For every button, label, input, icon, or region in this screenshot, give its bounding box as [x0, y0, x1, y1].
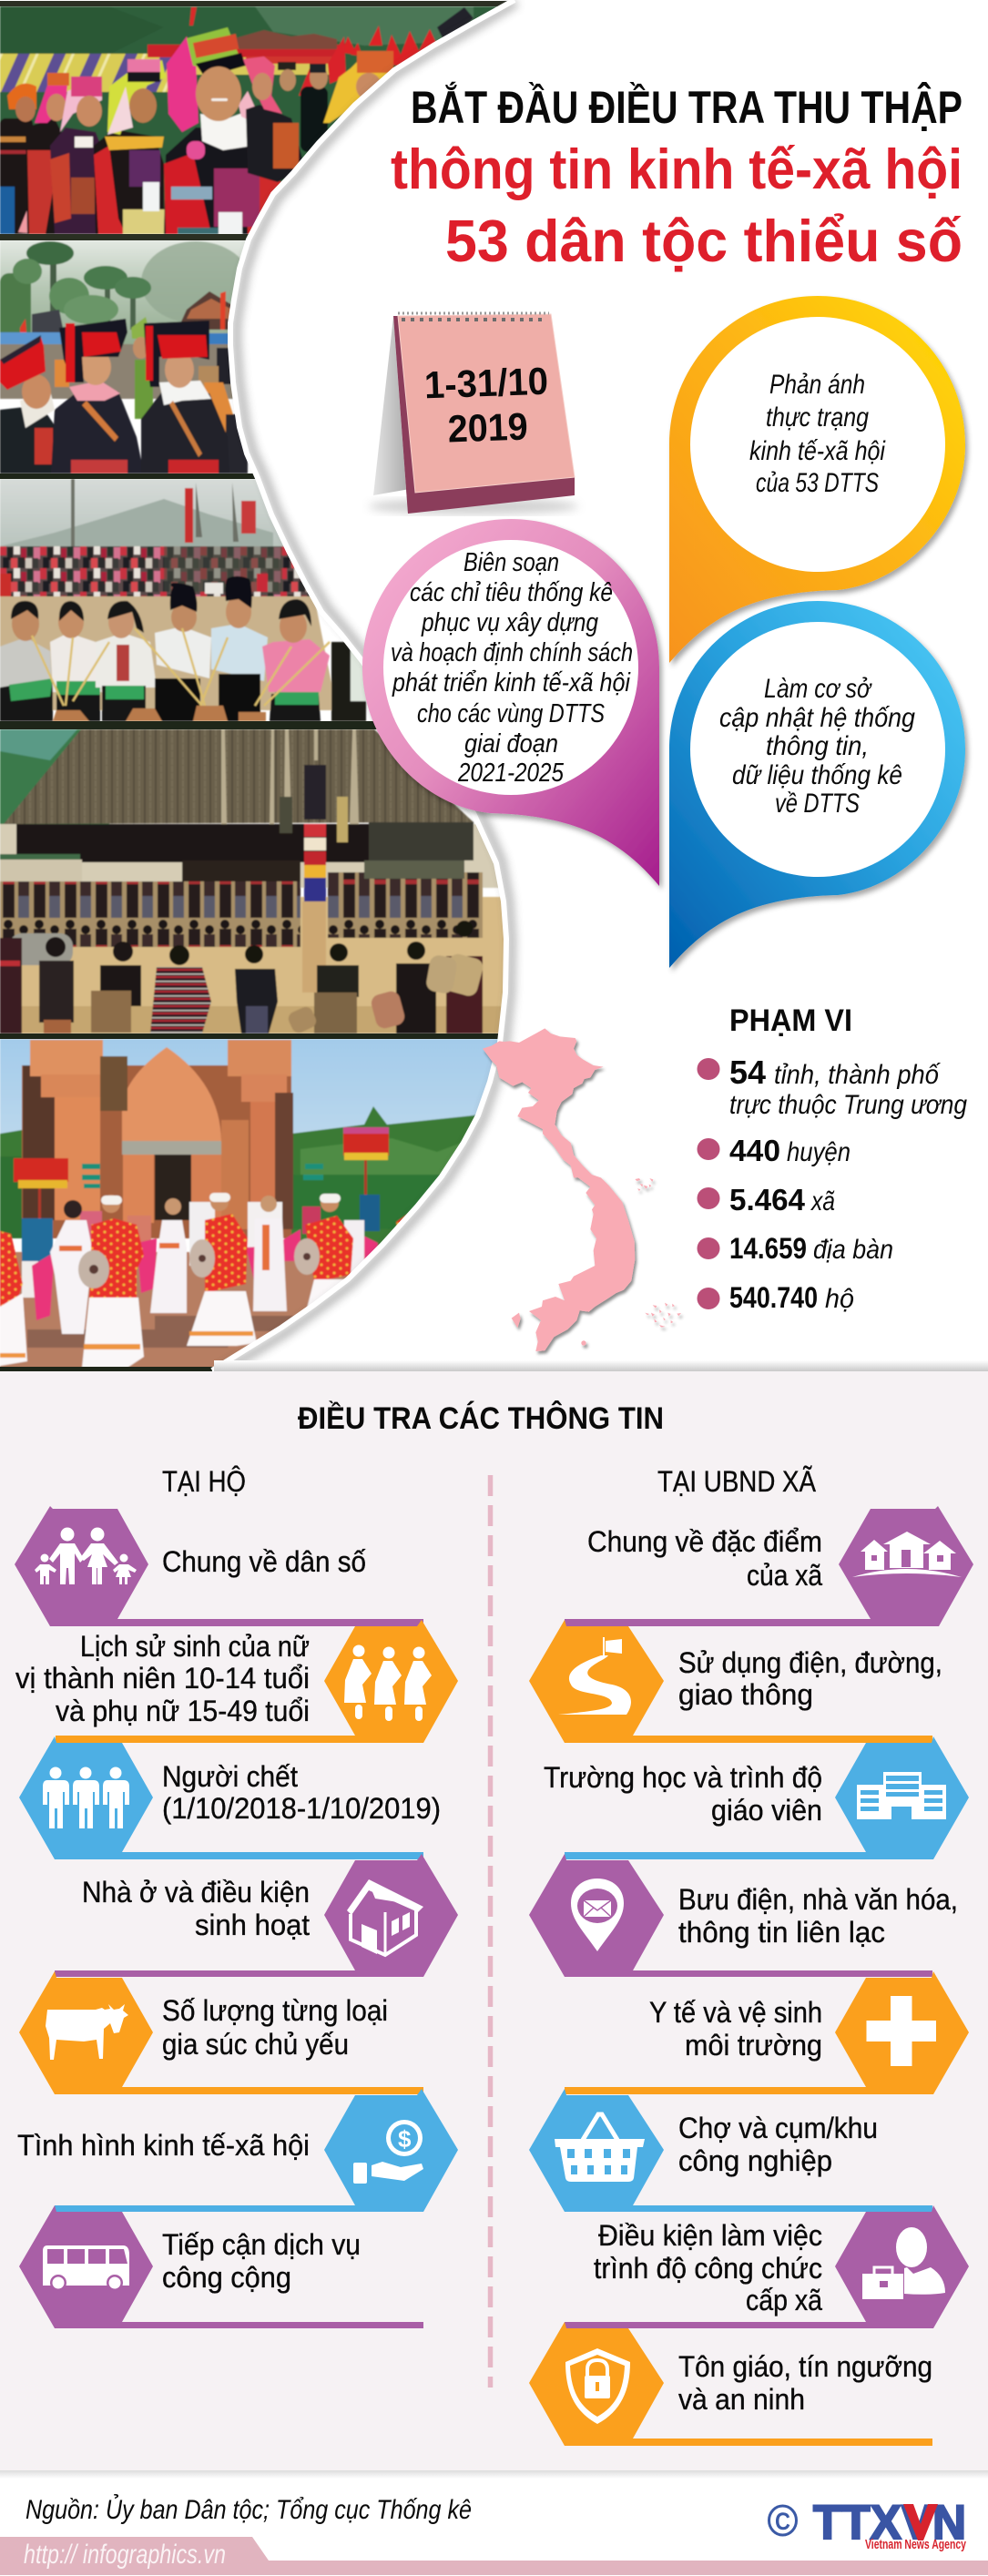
- row: religion and security: và an ninh: [678, 2383, 805, 2416]
- row: working conditions: cấp xã: [746, 2284, 822, 2316]
- scope: communes: xã: [810, 1186, 835, 1217]
- row: public services: [19, 2205, 423, 2328]
- curved white background shape: [212, 0, 988, 1375]
- dark band: between photo 2 and 3: [0, 473, 273, 479]
- calendar spiral: [398, 311, 549, 315]
- row: commune characteristics: Chung về đặc điểm: [587, 1525, 822, 1558]
- third girl: [50, 127, 105, 234]
- callout: yellow pin: thực trạng: [766, 402, 869, 433]
- fourth girl: [94, 129, 164, 234]
- callout: blue pin: dữ liệu thống kê: [732, 760, 902, 790]
- callout: pink pin: [362, 519, 659, 886]
- row: birth history: và phụ nữ 15-49 tuổi: [56, 1695, 310, 1727]
- far left girl: [0, 118, 33, 234]
- heading: commune column: TẠI UBND XÃ: [657, 1465, 817, 1498]
- calendar date: 2019: [447, 404, 528, 451]
- calendar date: 1-31/10: [423, 360, 549, 406]
- row: post office and culture: thông tin liên lạc: [678, 1916, 885, 1949]
- photo: women with red fringed hats: [0, 240, 273, 473]
- row: working conditions: [565, 2205, 969, 2328]
- woman 3: [141, 392, 229, 473]
- row: schools: Trường học và trình độ: [544, 1761, 822, 1794]
- row: post office and culture: [529, 1854, 958, 1977]
- icon: three people: [43, 1767, 129, 1828]
- scope: districts: [698, 1134, 850, 1167]
- scope: provinces: tỉnh, thành phố: [774, 1060, 941, 1090]
- row: markets: công nghiệp: [678, 2144, 832, 2177]
- ground: [0, 1251, 349, 1367]
- row: livestock: Số lượng từng loại: [162, 1994, 388, 2027]
- calendar page: [398, 314, 575, 493]
- calendar date: [423, 360, 550, 451]
- scope: communes: [698, 1183, 835, 1217]
- icon: house: [347, 1879, 423, 1955]
- scope: households: hộ: [825, 1284, 854, 1314]
- woman 2: [51, 392, 144, 473]
- callout: pink pin: giai đoạn: [464, 729, 558, 759]
- row: electricity and roads: [529, 1620, 942, 1743]
- row: household population: Chung về dân số: [162, 1545, 366, 1578]
- callout: yellow pin: [669, 296, 965, 663]
- icon: village: [852, 1532, 962, 1577]
- icon: cow: [46, 2004, 128, 2060]
- row: commune characteristics: của xã: [747, 1559, 822, 1592]
- panel: scope: [698, 1003, 967, 1314]
- woman 1: [0, 406, 55, 473]
- icon: school building: [857, 1772, 946, 1819]
- scope: areas: địa bàn: [813, 1235, 893, 1265]
- row: religion and security: [529, 2322, 932, 2446]
- foreground figures: [9, 933, 73, 965]
- row: health: môi trường: [685, 2029, 822, 2062]
- scope: districts: 440: [729, 1134, 780, 1167]
- title line 3: 53 dân tộc thiểu số: [445, 208, 963, 274]
- icon: location pin with envelope: [571, 1879, 624, 1951]
- row: working conditions: Điều kiện làm việc: [598, 2219, 822, 2252]
- panel top shadow: [214, 1360, 988, 1371]
- green stacks: [82, 1164, 100, 1169]
- icon: bus: [43, 2245, 129, 2291]
- callout: blue pin: [669, 601, 965, 968]
- drummers: [89, 1218, 144, 1298]
- bamboo straws: [32, 628, 330, 706]
- row: birth history: vị thành niên 10-14 tuổi: [15, 1662, 310, 1695]
- footer band: [0, 2537, 988, 2575]
- callout: yellow pin: Phản ánh: [769, 370, 865, 400]
- callout: pink pin: và hoạch định chính sách: [391, 638, 633, 667]
- dark band: between photo 1 and 2: [0, 234, 273, 240]
- callout: yellow pin: kinh tế-xã hội: [749, 436, 886, 466]
- row: birth history: [15, 1620, 458, 1743]
- heading: survey information: ĐIỀU TRA CÁC THÔNG TIN: [298, 1400, 664, 1436]
- row: housing: Nhà ở và điều kiện: [82, 1876, 310, 1909]
- green officer: [135, 360, 153, 419]
- row: post office and culture: Bưu điện, nhà văn hóa,: [678, 1883, 958, 1916]
- tower: [22, 1065, 291, 1238]
- scope: areas: [698, 1232, 893, 1265]
- photo: Central Highlands communal house festival: [0, 729, 546, 1035]
- callout: blue pin: Làm cơ sở: [764, 674, 872, 704]
- icon: medical cross: [867, 1996, 936, 2066]
- parasols: [14, 1158, 68, 1182]
- callout: yellow pin: của 53 DTTS: [756, 468, 879, 498]
- right side figures: [246, 105, 305, 182]
- row: livestock: gia súc chủ yếu: [162, 2028, 349, 2061]
- row: health: Y tế và vệ sinh: [649, 1996, 822, 2029]
- row: electricity and roads: giao thông: [678, 1678, 813, 1711]
- icon: hand with coin: $: [398, 2125, 412, 2153]
- panel: survey information: [0, 1371, 988, 2470]
- icon: official with briefcase: [862, 2227, 945, 2299]
- calendar: [369, 313, 578, 514]
- scope: areas: 14.659: [729, 1232, 807, 1265]
- row: religion and security: Tôn giáo, tín ngưỡng: [678, 2350, 932, 2383]
- TTXVN wordmark: TTXVN: [813, 2496, 966, 2550]
- icon: winding road: [558, 1637, 631, 1715]
- panel bottom shadow: [0, 2470, 988, 2479]
- row: housing: sinh hoạt: [195, 1909, 310, 1941]
- callout: pink pin: các chỉ tiêu thống kê: [410, 578, 613, 607]
- row: markets: Chợ và cụm/khu: [678, 2112, 878, 2144]
- row: deaths: Người chết: [162, 1760, 298, 1793]
- curve shadow: [219, 3, 516, 1371]
- row: markets: [529, 2089, 932, 2212]
- row: livestock: [19, 1971, 423, 2094]
- callout: pink pin: cho các vùng DTTS: [417, 699, 606, 728]
- palm trees: [49, 264, 57, 311]
- row: deaths: [19, 1736, 441, 1859]
- scope: households: [698, 1281, 854, 1314]
- heading: households column: TẠI HỘ: [162, 1465, 246, 1498]
- curve white edge: [212, 0, 514, 1370]
- dark band: photo 5 bottom: [0, 1367, 219, 1371]
- scope: households: 540.740: [729, 1281, 818, 1314]
- row: public services: Tiếp cận dịch vụ: [162, 2228, 361, 2261]
- row: housing: [55, 1854, 458, 1977]
- dark band: photo 1 top: [0, 1, 546, 6]
- photo: Cham tower and dancers: [0, 1039, 546, 1370]
- main smiling girl: [163, 127, 250, 234]
- background dancers: [20, 1217, 55, 1262]
- mid row of dancers: [0, 881, 300, 947]
- row: socio-economic status: [17, 2089, 458, 2212]
- dark band: between photo 3 and 4: [0, 721, 382, 729]
- row: schools: [544, 1736, 969, 1859]
- row: deaths: (1/10/2018-1/10/2019): [162, 1792, 441, 1825]
- row: health: [565, 1971, 969, 2094]
- jars: [53, 706, 266, 721]
- callout: pink pin: Biên soạn: [463, 548, 559, 577]
- pink flags: [32, 1229, 378, 1320]
- totem pole: [302, 901, 326, 993]
- dark band: between photo 4 and 5: [0, 1033, 510, 1039]
- copyright mark: C: [775, 2508, 790, 2535]
- row: working conditions: trình độ công chức: [594, 2252, 822, 2285]
- map of Vietnam: [483, 1028, 681, 1351]
- women: [0, 639, 52, 688]
- icon: shopping basket: [555, 2114, 645, 2182]
- callout: pink pin: 2021-2025: [457, 759, 565, 788]
- photo: Thai women drinking rice wine: [0, 479, 382, 721]
- row: commune characteristics: [565, 1506, 973, 1626]
- scope: provinces: 54: [729, 1054, 766, 1091]
- callout: pink pin: phát triển kinh tế-xã hội: [392, 668, 631, 697]
- icon: shield with lock: [565, 2348, 630, 2424]
- calendar shadow: [369, 498, 578, 514]
- scope heading: PHẠM VI: [729, 1003, 852, 1038]
- callout: blue pin: cập nhật hệ thống: [719, 703, 915, 733]
- icon: family: [35, 1528, 137, 1584]
- calendar back: [393, 316, 575, 514]
- women in white: [50, 1220, 93, 1334]
- row: electricity and roads: Sử dụng điện, đường,: [678, 1646, 942, 1679]
- source note: Nguồn: Ủy ban Dân tộc; Tổng cục Thống kê: [25, 2493, 472, 2525]
- callout: blue pin: thông tin,: [766, 731, 869, 761]
- calendar holes: [402, 318, 547, 321]
- row: public services: công cộng: [162, 2261, 291, 2294]
- callout: pink pin: phục vụ xây dựng: [421, 608, 598, 637]
- row: schools: giáo viên: [711, 1794, 822, 1827]
- website link: http:// infographics.vn: [24, 2540, 226, 2570]
- second girl: [25, 118, 64, 234]
- row: socio-economic status: Tình hình kinh tế-xã hội: [17, 2129, 310, 2162]
- icon: pregnant women: [344, 1644, 432, 1721]
- callout: blue pin: về DTTS: [775, 789, 860, 819]
- photo: ethnic girls in festival dress: [0, 6, 546, 234]
- copyright mark: [769, 2506, 796, 2535]
- scope: communes: 5.464: [729, 1183, 806, 1217]
- calendar stand: [373, 317, 410, 514]
- title: [391, 82, 963, 274]
- scope: provinces: [698, 1054, 967, 1120]
- logo: TTXVN: [769, 2496, 966, 2552]
- right orange girl: [204, 381, 234, 433]
- icon: hand with coin: [353, 2120, 423, 2184]
- row: birth history: Lịch sử sinh của nữ: [80, 1630, 310, 1663]
- scope: districts: huyện: [787, 1137, 850, 1167]
- row: household population: [15, 1506, 423, 1626]
- V accent: [903, 2504, 938, 2540]
